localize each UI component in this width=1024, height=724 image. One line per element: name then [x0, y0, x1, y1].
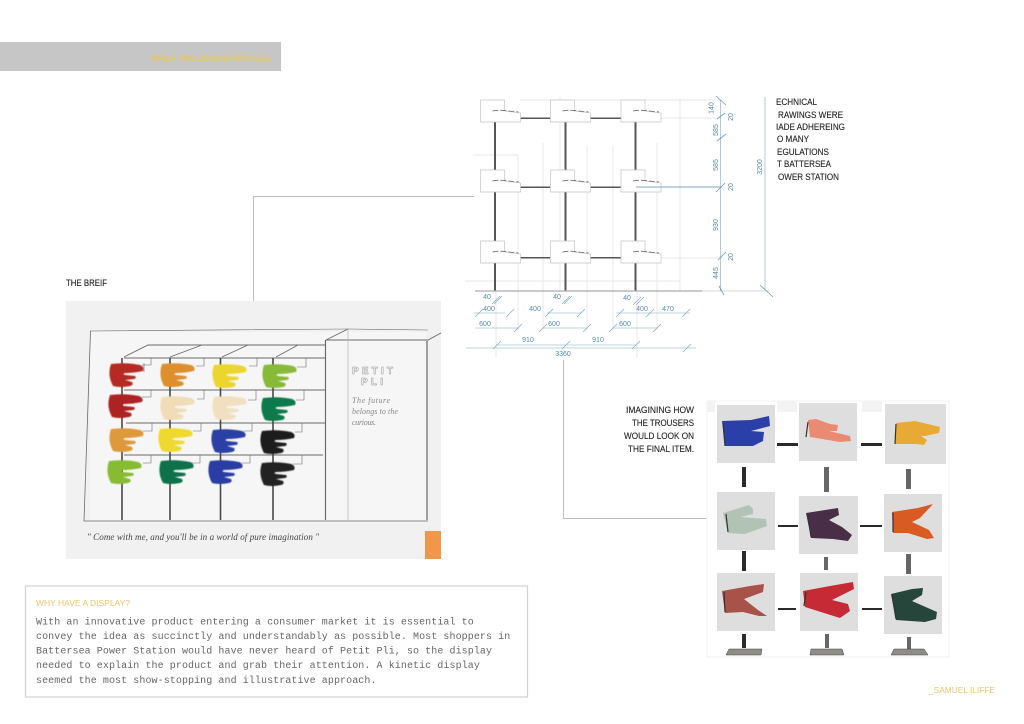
vertical dimensions: 20: [728, 113, 735, 121]
author credit: _SAMUEL ILIFFE: [928, 685, 995, 695]
vertical dimensions: 445: [713, 267, 720, 279]
horizontal dimensions: 40: [623, 295, 631, 302]
dimension ticks: [475, 96, 773, 352]
posts and rails: [494, 118, 636, 291]
header title: BRIEF AND DESIGN PROCESS: [152, 53, 271, 63]
note: imagining the trousers: [624, 405, 694, 454]
panel: trouser display mockup: [707, 401, 949, 657]
heading: the brief: THE BREIF: [66, 278, 107, 288]
sketch signage: PLI: [361, 377, 383, 388]
note: technical drawings: OWER STATION: [778, 172, 839, 182]
vertical dimensions: 20: [728, 253, 735, 261]
trousers: [722, 416, 940, 622]
note: technical drawings: T BATTERSEA: [777, 159, 831, 169]
note: technical drawings: [776, 97, 845, 182]
photo tiles: [717, 403, 946, 634]
horizontal dimensions: 600: [548, 321, 560, 328]
horizontal dimensions: [479, 294, 674, 358]
callout body: Battersea Power Station would have never heard of Petit Pli, so the display: [36, 646, 492, 658]
note: technical drawings: IADE ADHEREING: [776, 122, 845, 132]
horizontal dimensions: 400: [483, 306, 495, 313]
note: imagining the trousers: THE TROUSERS: [632, 418, 694, 428]
sketch trousers: [107, 363, 297, 486]
callout body: [36, 616, 510, 687]
vertical dimensions: 20: [728, 183, 735, 191]
horizontal dimensions: 600: [619, 321, 631, 328]
callout body: needed to explain the product and grab their attention. A kinetic display: [36, 660, 480, 672]
horizontal dimensions: 910: [522, 337, 534, 344]
note: imagining the trousers: IMAGINING HOW: [626, 405, 694, 415]
note: technical drawings: EGULATIONS: [777, 147, 829, 157]
vertical dimensions: 585: [713, 159, 720, 171]
vertical dimensions: 3200: [757, 159, 764, 175]
note: technical drawings: O MANY: [777, 134, 809, 144]
horizontal dimensions: 470: [662, 306, 674, 313]
construction lines: [465, 97, 722, 358]
stands: [726, 649, 928, 655]
sketch signage: belongs to the: [352, 407, 398, 416]
sketch signage: The future: [352, 396, 390, 405]
sketch frame: [84, 329, 441, 521]
callout body: convey the idea as succinctly and understandably as possible. Most shoppers in: [36, 631, 510, 643]
callout heading: WHY HAVE A DISPLAY?: [36, 598, 130, 608]
vertical dimensions: [708, 102, 764, 279]
note: technical drawings: ECHNICAL: [776, 97, 817, 107]
display modules: [480, 100, 661, 263]
horizontal dimensions: 910: [592, 337, 604, 344]
ground line: [475, 290, 702, 292]
sketch caption: " Come with me, and you'll be in a world of pure imagination ": [87, 532, 319, 542]
horizontal dimensions: 400: [529, 306, 541, 313]
sketch signage: curious.: [352, 418, 376, 427]
callout body: seemed the most show-stopping and illustrative approach.: [36, 675, 377, 687]
note: imagining the trousers: THE FINAL ITEM.: [628, 444, 694, 454]
horizontal dimensions: 3360: [555, 351, 571, 358]
horizontal dimensions: 40: [483, 294, 491, 301]
note: technical drawings: RAWINGS WERE: [778, 110, 843, 120]
connector bars: [742, 443, 911, 649]
technical drawing: [465, 96, 773, 358]
vertical dimensions: 585: [713, 124, 720, 136]
connector: drawing to mockup: [564, 360, 707, 518]
note: imagining the trousers: WOULD LOOK ON: [624, 431, 694, 441]
callout: why have a display: [26, 586, 528, 697]
horizontal dimensions: 600: [479, 321, 491, 328]
horizontal dimensions: 400: [636, 306, 648, 313]
vertical dimensions: 140: [708, 102, 716, 114]
orange swatch: [425, 531, 441, 559]
callout body: With an innovative product entering a consumer market it is essential to: [36, 616, 474, 628]
horizontal dimensions: 40: [553, 294, 561, 301]
panel: pencil sketch of display: [66, 301, 441, 559]
sketch signage: PETIT: [352, 366, 393, 377]
vertical dimensions: 930: [713, 219, 720, 231]
connector: brief to technical drawing: [254, 196, 474, 301]
dimension lines: [466, 97, 765, 348]
sketch signage: [352, 366, 398, 427]
header bar: [0, 42, 281, 71]
